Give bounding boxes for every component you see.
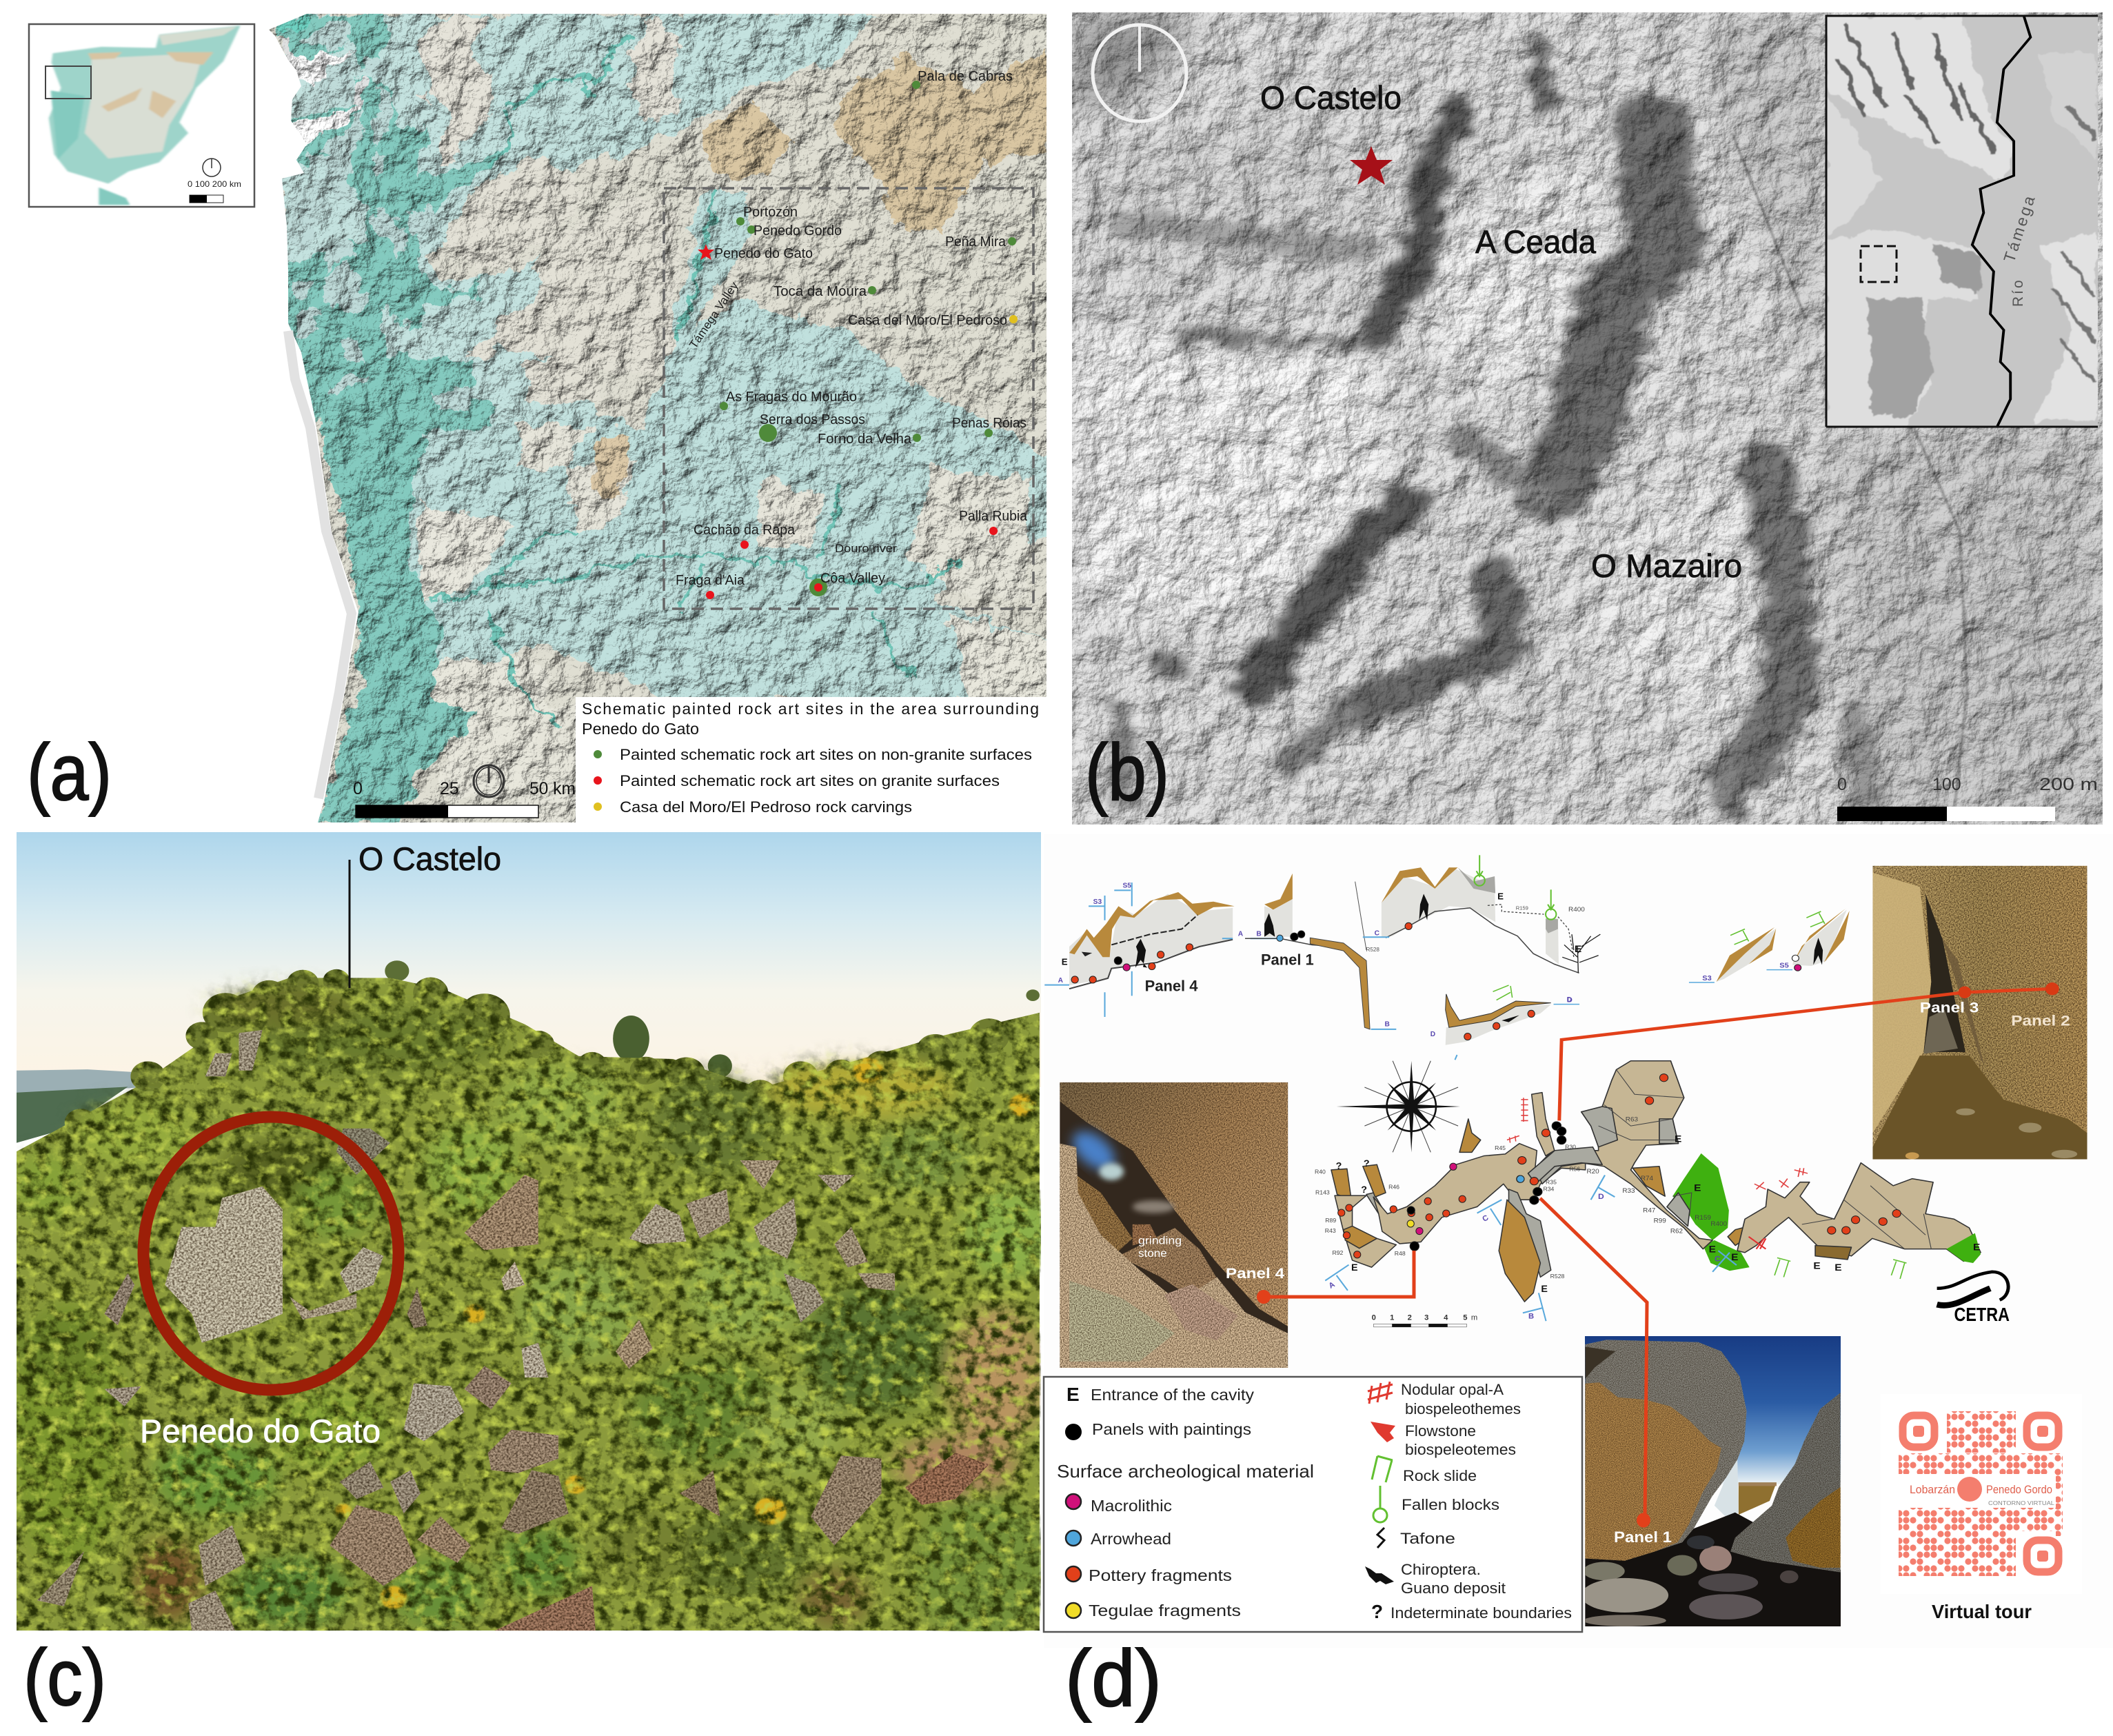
scale bar: 200 m — [2039, 775, 2098, 794]
symbols legend: Arrowhead — [1091, 1530, 1171, 1548]
label Panel 3: Panel 3 — [1920, 999, 1979, 1016]
arrowhead — [1066, 1531, 1081, 1546]
site labels: Palla Rubia — [959, 509, 1028, 524]
plan labels: R34 — [1543, 1185, 1555, 1192]
section D: D — [1430, 1031, 1435, 1038]
site labels: Portozón — [743, 205, 798, 220]
pottery — [1066, 1566, 1081, 1582]
section A-B: B — [1256, 931, 1262, 938]
site labels: Pala de Cabras — [918, 69, 1013, 84]
plan labels: R89 — [1325, 1217, 1336, 1224]
label Panel 1: Panel 1 — [1614, 1528, 1672, 1546]
red ellipse marking Penedo do Gato — [143, 1117, 398, 1390]
site labels: Serra dos Passos — [760, 412, 865, 427]
river Tamega line — [1972, 16, 2030, 427]
site markers — [698, 81, 1018, 599]
symbols legend: Entrance of the cavity — [1091, 1386, 1255, 1404]
plan symbols E and ?: ? — [1336, 1160, 1342, 1171]
site labels: Forno da Velha — [818, 432, 912, 447]
plan E marks: E — [1973, 1242, 1980, 1253]
dashed study area frame — [664, 188, 1033, 609]
plan E marks: E — [1575, 945, 1581, 955]
symbols legend: Nodular opal-A — [1401, 1381, 1504, 1398]
site labels: Peña Mira — [945, 234, 1007, 250]
panel 3 marker — [1959, 987, 1971, 998]
plan symbols E and ?: E — [1351, 1262, 1358, 1273]
section S3: S3 — [1702, 974, 1712, 982]
map legend: Penedo do Gato — [582, 720, 699, 738]
tegulae — [1066, 1603, 1081, 1618]
symbols legend: Panels with paintings — [1092, 1420, 1251, 1438]
map legend: Painted schematic rock art sites on granite surfaces — [620, 772, 1000, 789]
bar scale: 4 — [1444, 1314, 1448, 1322]
nodular opal symbol — [1368, 1382, 1393, 1404]
bar scale: 2 — [1408, 1314, 1412, 1322]
photo: Panel 1 — [1540, 1198, 1841, 1628]
compass rose — [1337, 1061, 1460, 1152]
plan symbols E and ? — [1336, 1158, 1548, 1295]
bar scale: 5 — [1463, 1314, 1467, 1322]
section letters: C — [1481, 1213, 1490, 1224]
vegetated hillside — [7, 969, 1056, 1644]
QR code virtual tour: Lobarzán — [1910, 1483, 1955, 1496]
legend heading: Surface archeological material — [1057, 1461, 1314, 1482]
symbols legend: Chiroptera. — [1401, 1561, 1481, 1578]
plan labels: R33 — [1622, 1187, 1635, 1195]
section letters: C — [1715, 1255, 1721, 1263]
section A-B: S3 — [1093, 898, 1102, 906]
symbols legend: biospeleothemes — [1405, 1400, 1521, 1417]
plan labels: R45 — [1495, 1144, 1506, 1151]
inset locator box — [46, 66, 91, 99]
river label: Río — [2010, 278, 2026, 307]
section letters: B — [1528, 1313, 1534, 1321]
symbols legend: Rock slide — [1403, 1467, 1477, 1484]
plan E marks: E — [1834, 1263, 1842, 1273]
inset scale — [188, 179, 241, 203]
tafone symbol — [1377, 1528, 1384, 1548]
site labels: Cachão da Rapa — [694, 523, 796, 538]
inset scale: 0 100 200 km — [188, 179, 241, 189]
entrance symbol: E — [1066, 1384, 1080, 1405]
inset frame — [1826, 16, 2098, 427]
inset map: Iberia — [29, 24, 254, 207]
section S5 — [1766, 909, 1850, 971]
section C: E — [1497, 891, 1504, 902]
relief map background — [262, 10, 1056, 827]
plan E marks: E — [1813, 1261, 1821, 1272]
symbols legend: Flowstone — [1405, 1422, 1476, 1440]
plan labels: R20 — [1587, 1168, 1599, 1175]
north arrow — [1093, 25, 1186, 121]
site labels: Penedo do Gato — [714, 246, 813, 261]
photo label: Panel 4 — [1226, 1265, 1284, 1282]
tree at section C end — [1562, 934, 1600, 973]
cave sections and plan, right half — [1517, 906, 2010, 1326]
CETRA logo — [1937, 1272, 2010, 1326]
section A-B: A — [1058, 977, 1064, 985]
connector Panel 4 — [1263, 1251, 1414, 1297]
panel a: regional relief map — [27, 10, 1056, 827]
sandy coast strip — [288, 331, 352, 798]
symbols legend: Tafone — [1400, 1530, 1455, 1547]
site labels: Penedo Gordo — [754, 223, 842, 239]
north arrow — [474, 765, 504, 797]
plan labels: R159 — [1695, 1214, 1711, 1222]
plan markers — [1338, 1122, 1566, 1258]
connector Panel 2-3 — [1559, 989, 2052, 1120]
plan labels: R92 — [1332, 1249, 1344, 1256]
plan labels: R143 — [1315, 1189, 1330, 1196]
panel letter b: (b) — [1085, 727, 1169, 817]
bar scale: 3 — [1424, 1314, 1428, 1322]
symbols legend: Tegulae fragments — [1089, 1602, 1241, 1619]
marker Panel 4 — [1257, 1290, 1271, 1304]
plan labels: R99 — [1654, 1218, 1666, 1224]
cave plan east — [1528, 1061, 1981, 1271]
distant hills — [16, 1069, 158, 1143]
scale bar: 0 — [1837, 775, 1847, 794]
bar scale: 1 — [1390, 1314, 1394, 1322]
panel letter a: (a) — [27, 727, 112, 817]
section D end label — [1554, 996, 1579, 1005]
plan markers — [1517, 1074, 1901, 1234]
bar scale — [1372, 1314, 1477, 1327]
CETRA logo: CETRA — [1954, 1304, 2010, 1326]
plan labels: R40 — [1315, 1168, 1326, 1175]
label Penedo do Gato: Penedo do Gato — [140, 1413, 381, 1449]
cave sections and plan, left half — [1044, 855, 1586, 1327]
symbols legend: Indeterminate boundaries — [1391, 1604, 1572, 1622]
place label A Ceada: A Ceada — [1475, 223, 1597, 260]
connector Panel 1 — [1540, 1198, 1647, 1520]
plan labels: R400 — [1568, 906, 1585, 914]
panel letter c: (c) — [23, 1633, 106, 1722]
panel c: aerial photograph — [7, 832, 1056, 1722]
label O Castelo: O Castelo — [358, 840, 501, 877]
map legend — [576, 697, 1047, 822]
section S3 — [1689, 927, 1776, 982]
inset detail box — [1861, 246, 1897, 282]
hilltop trees — [385, 960, 1040, 1078]
section D — [1430, 985, 1572, 1045]
section C — [1363, 855, 1579, 973]
site labels: Casa del Moro/El Pedroso — [848, 313, 1007, 328]
scale bar: 25 — [440, 779, 459, 798]
site star — [1350, 146, 1393, 185]
plan labels: R528 — [1550, 1273, 1565, 1280]
symbols legend: biospeleotemes — [1405, 1441, 1516, 1458]
plan labels — [1568, 906, 1727, 1235]
sky — [17, 832, 1041, 1087]
plan labels: R30 — [1565, 1143, 1576, 1150]
hillshade terrain — [1072, 12, 2107, 830]
bar scale: m — [1471, 1314, 1477, 1322]
site labels: Fraga d'Aia — [676, 573, 745, 588]
map legend: Schematic painted rock art sites in the area surrounding — [582, 700, 1039, 718]
plan labels: R46 — [1388, 1183, 1399, 1190]
scale bar — [353, 779, 576, 818]
symbols legend: Guano deposit — [1401, 1579, 1506, 1597]
plan labels: R48 — [1395, 1250, 1406, 1257]
panel 2 marker — [2045, 982, 2059, 995]
section letters — [1327, 1213, 1534, 1321]
contour lines — [1599, 1070, 1931, 1249]
cave plan west — [1331, 1093, 1586, 1302]
opal and slide symbols — [1749, 1168, 1906, 1279]
plan labels: R74 — [1641, 1175, 1654, 1182]
flowstone symbol — [1371, 1422, 1395, 1442]
map legend: Painted schematic rock art sites on non-granite surfaces — [620, 746, 1032, 763]
section A-B — [1044, 874, 1396, 1029]
label Panel 2: Panel 2 — [2011, 1013, 2070, 1029]
plan labels: R400 — [1710, 1220, 1727, 1228]
section C: R159 — [1516, 905, 1528, 911]
section D: D — [1567, 996, 1572, 1004]
site labels: As Fragas do Mourão — [726, 390, 857, 405]
river label: Támega — [2000, 192, 2039, 265]
section S5: S5 — [1779, 962, 1789, 969]
plan E marks: E — [1731, 1252, 1739, 1263]
section C: C — [1375, 930, 1380, 938]
site labels: Penas Róias — [952, 416, 1027, 431]
section letters: A — [1327, 1280, 1336, 1291]
scale bar — [1837, 775, 2098, 821]
fallen blocks symbol — [1373, 1486, 1387, 1522]
map legend: Casa del Moro/El Pedroso rock carvings — [620, 798, 912, 816]
caption Virtual tour: Virtual tour — [1932, 1601, 2032, 1622]
section A-B: S5 — [1123, 882, 1131, 889]
site labels: Douro river — [835, 542, 897, 555]
photo: Panels 2 and 3 — [1559, 866, 2087, 1160]
plan labels — [1315, 1143, 1580, 1280]
O Castelo leader line — [349, 860, 350, 988]
section A-B: A — [1238, 931, 1244, 938]
plan symbols E and ?: E — [1541, 1284, 1548, 1295]
plan labels: R63 — [1626, 1116, 1638, 1123]
granite boulders — [37, 1030, 989, 1631]
panels symbol — [1065, 1424, 1082, 1440]
panel letter d: (d) — [1065, 1633, 1162, 1723]
site labels: Toca da Moura — [774, 284, 867, 299]
bat symbol — [1365, 1566, 1394, 1584]
plan E marks: E — [1675, 1134, 1681, 1144]
marker Panel 1 — [1637, 1513, 1650, 1528]
plan symbols E and ?: ? — [1361, 1184, 1367, 1195]
symbols legend: Fallen blocks — [1402, 1496, 1499, 1513]
plan labels: R62 — [1670, 1228, 1683, 1235]
place label O Mazairo: O Mazairo — [1591, 547, 1742, 584]
place label O Castelo: O Castelo — [1260, 79, 1402, 116]
section marks — [1591, 1175, 1737, 1272]
symbols legend: Pottery fragments — [1089, 1566, 1232, 1584]
inset: Tamega river hillshade — [1826, 16, 2098, 427]
scale bar: 0 — [353, 779, 363, 798]
section letters — [1598, 1193, 1721, 1263]
bar scale: 0 — [1372, 1314, 1376, 1322]
rock slide symbol — [1372, 1456, 1393, 1482]
plan labels: R43 — [1325, 1227, 1336, 1234]
scale bar: 100 — [1932, 775, 1961, 794]
plan labels: R56 — [1569, 1165, 1580, 1172]
macrolithic — [1066, 1494, 1081, 1509]
section letters: D — [1598, 1193, 1604, 1201]
symbols legend: Macrolithic — [1091, 1497, 1172, 1515]
QR code virtual tour: CONTORNO VIRTUAL — [1988, 1500, 2055, 1506]
panel d: cave survey — [1044, 834, 2113, 1723]
plan E marks — [1575, 945, 1980, 1273]
section A-B: E — [1062, 957, 1068, 967]
photo annotation: stone — [1138, 1248, 1167, 1260]
indeterminate symbol: ? — [1371, 1601, 1383, 1622]
panel b: LiDAR hillshade — [1072, 12, 2107, 830]
QR code virtual tour: Penedo Gordo — [1986, 1483, 2052, 1496]
plan E marks: E — [1709, 1244, 1716, 1255]
section D end label: D — [1567, 996, 1573, 1004]
label Panel 1: Panel 1 — [1261, 951, 1314, 969]
scale bar: 50 km — [529, 779, 576, 798]
section A-B: B — [1384, 1020, 1390, 1028]
plan symbols E and ?: ? — [1364, 1158, 1370, 1169]
section marks — [1325, 1055, 1546, 1321]
plan labels: R35 — [1546, 1178, 1557, 1185]
symbols legend — [1044, 1377, 1582, 1632]
inset north arrow — [203, 159, 221, 176]
site labels: Côa Valley — [820, 571, 885, 586]
label Panel 4: Panel 4 — [1145, 977, 1198, 994]
plan E marks: E — [1694, 1183, 1701, 1193]
photo: Panel 4 — [1060, 1082, 1288, 1368]
site labels — [676, 69, 1028, 588]
plan labels: R47 — [1643, 1207, 1655, 1214]
QR code virtual tour — [1881, 1394, 2082, 1594]
opal symbol marks — [1507, 1098, 1528, 1143]
site labels: Támega Valley — [687, 279, 741, 351]
photo annotation: grinding — [1138, 1235, 1182, 1247]
section A-B: R528 — [1366, 947, 1379, 953]
